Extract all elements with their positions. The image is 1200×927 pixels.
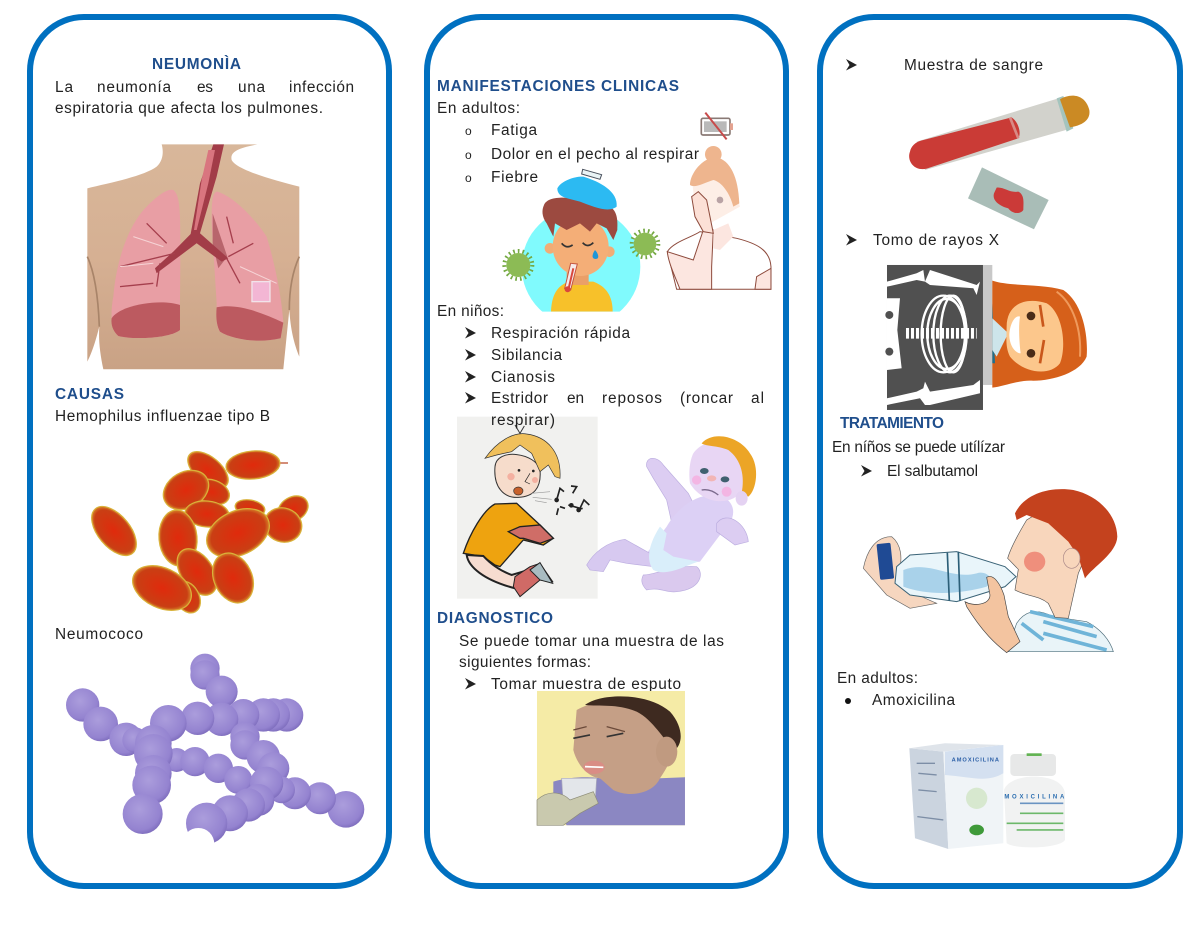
intro text: es xyxy=(197,79,213,96)
text: adult symptoms list: o xyxy=(465,148,472,162)
image: hemophilus bacteria xyxy=(83,445,313,619)
image: pneumococcus chains xyxy=(66,654,364,860)
text: child treatment: El salbutamol xyxy=(887,463,978,480)
heading: diagnostico: DIAGNOSTICO xyxy=(437,610,553,627)
text: muestra de sangre: Muestra de sangre xyxy=(904,57,1043,74)
illustration: child giving sputum sample xyxy=(537,691,685,825)
illustration: coughing child xyxy=(457,417,598,599)
image: lungs in torso xyxy=(87,144,299,369)
illustration: crying baby xyxy=(587,436,756,592)
text: adult symptoms list: Dolor en el pecho al respirar xyxy=(491,146,699,163)
text: child symptoms list: Sibilancia xyxy=(491,347,562,364)
panel frame left xyxy=(30,17,389,886)
text: adult treatment xyxy=(837,670,955,709)
text: child symptoms list: Respiración rápida xyxy=(491,325,630,342)
text: adult symptoms list: Fiebre xyxy=(491,169,538,186)
text: child symptoms list: reposos xyxy=(602,390,662,407)
illustration: tired woman xyxy=(667,146,771,289)
panel: manifestaciones y diagnostico xyxy=(427,17,786,886)
text: child treatment: En níños se puede utílízar xyxy=(832,439,1005,456)
text: diagnostic intro: Se puede tomar una muestra de las xyxy=(459,633,724,650)
title: neumonia: NEUMONÌA xyxy=(152,56,241,73)
text: child symptoms list: Estridor xyxy=(491,390,548,407)
heading: tratamiento: TRATAMIENTO xyxy=(840,415,944,432)
text: adult symptoms list: Fatiga xyxy=(491,122,537,139)
text: adult symptoms list: o xyxy=(465,171,472,185)
heading: manifestaciones clinicas: MANIFESTACIONES CLINICAS xyxy=(437,78,679,95)
intro text: neumonía xyxy=(97,79,171,96)
heading: causas: CAUSAS xyxy=(55,386,124,403)
panel: neumonia y causas xyxy=(30,17,389,886)
illustration: x-ray and child xyxy=(885,265,1087,410)
image: amoxicillin box and bottle xyxy=(909,743,1065,849)
text: diagnostic intro: siguientes formas: xyxy=(459,654,591,671)
text: hemophilus: Hemophilus influenzae tipo B xyxy=(55,408,270,425)
text: neumococo: Neumococo xyxy=(55,626,143,643)
text: adult symptoms list: En adultos: xyxy=(437,100,520,117)
text: child symptoms list: (roncar xyxy=(680,390,733,407)
panel: diagnostico y tratamiento xyxy=(820,17,1180,886)
text: adult symptoms list xyxy=(437,100,699,186)
text: child symptoms list: Cianosis xyxy=(491,369,555,386)
text: child treatment xyxy=(832,439,1005,480)
icon: empty battery xyxy=(701,113,733,139)
illustration: feverish boy xyxy=(504,169,658,326)
panel frame middle xyxy=(427,17,786,886)
intro text: infección xyxy=(289,79,354,96)
text: child symptoms list: en xyxy=(567,390,584,407)
illustration: blood tube and slide xyxy=(909,96,1089,229)
text: child symptoms list: En niños: xyxy=(437,303,504,320)
text: adult symptoms list: o xyxy=(465,124,472,138)
text: diagnostic intro: Tomar muestra de esputo xyxy=(491,676,681,693)
intro text: espiratoria que afecta los pulmones. xyxy=(55,100,323,117)
image: amoxicillin box and bottle: MOXICILINA xyxy=(1004,794,1065,800)
intro text: La xyxy=(55,79,73,96)
intro text: una xyxy=(238,79,265,96)
text: child symptoms list: al xyxy=(751,390,764,407)
text: child symptoms list xyxy=(437,303,764,407)
text: adult treatment: En adultos: xyxy=(837,670,918,687)
intro text xyxy=(55,79,354,117)
panel frame right xyxy=(820,17,1180,886)
text: adult treatment: Amoxicilina xyxy=(872,692,955,709)
text: tomo de rayos x: Tomo de rayos X xyxy=(873,232,999,249)
text: diagnostic intro xyxy=(459,633,724,693)
image: amoxicillin box and bottle: AMOXICILINA xyxy=(952,758,999,764)
text: respirar line: respirar) xyxy=(491,412,555,429)
illustration: boy with inhaler spacer xyxy=(863,489,1117,653)
